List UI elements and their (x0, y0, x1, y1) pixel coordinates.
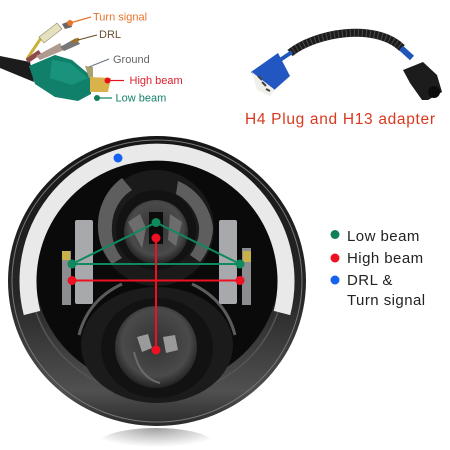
label: low beam: Low beam (116, 92, 166, 104)
legend: Turn signal (347, 292, 426, 309)
wiring plug photo (0, 21, 111, 101)
label: DRL (78, 29, 121, 41)
green dots (152, 218, 160, 227)
lower lens (115, 306, 197, 388)
legend: Low beam (347, 228, 420, 245)
label: turn signal: Turn signal (93, 12, 147, 24)
label: ground: Ground (113, 54, 150, 66)
label: high beam: High beam (130, 75, 183, 87)
white halo ring (28, 152, 286, 313)
inner black housing (35, 156, 279, 388)
label: turn signal (67, 12, 147, 26)
label: DRL: DRL (99, 29, 121, 41)
outer bezel (8, 136, 306, 426)
left LED block (75, 220, 93, 304)
legend: High beam (347, 250, 424, 267)
upper lens (124, 200, 188, 264)
reflection under lamp (98, 428, 214, 450)
lower reflector (81, 287, 233, 403)
upper reflector (98, 170, 214, 286)
legend: DRL & (347, 272, 393, 289)
label: high beam (104, 75, 183, 87)
blue DRL dot (114, 154, 122, 162)
adapter harness photo (251, 33, 442, 100)
adapter caption: H4 Plug and H13 adapter (245, 111, 435, 128)
green low beam triangle (72, 222, 240, 264)
LED chips (62, 251, 70, 260)
headlight (8, 136, 306, 450)
red dots (152, 234, 160, 242)
right LED block (219, 220, 237, 304)
red high beam lines (72, 238, 240, 350)
label: ground (89, 54, 150, 67)
legend (330, 228, 426, 309)
